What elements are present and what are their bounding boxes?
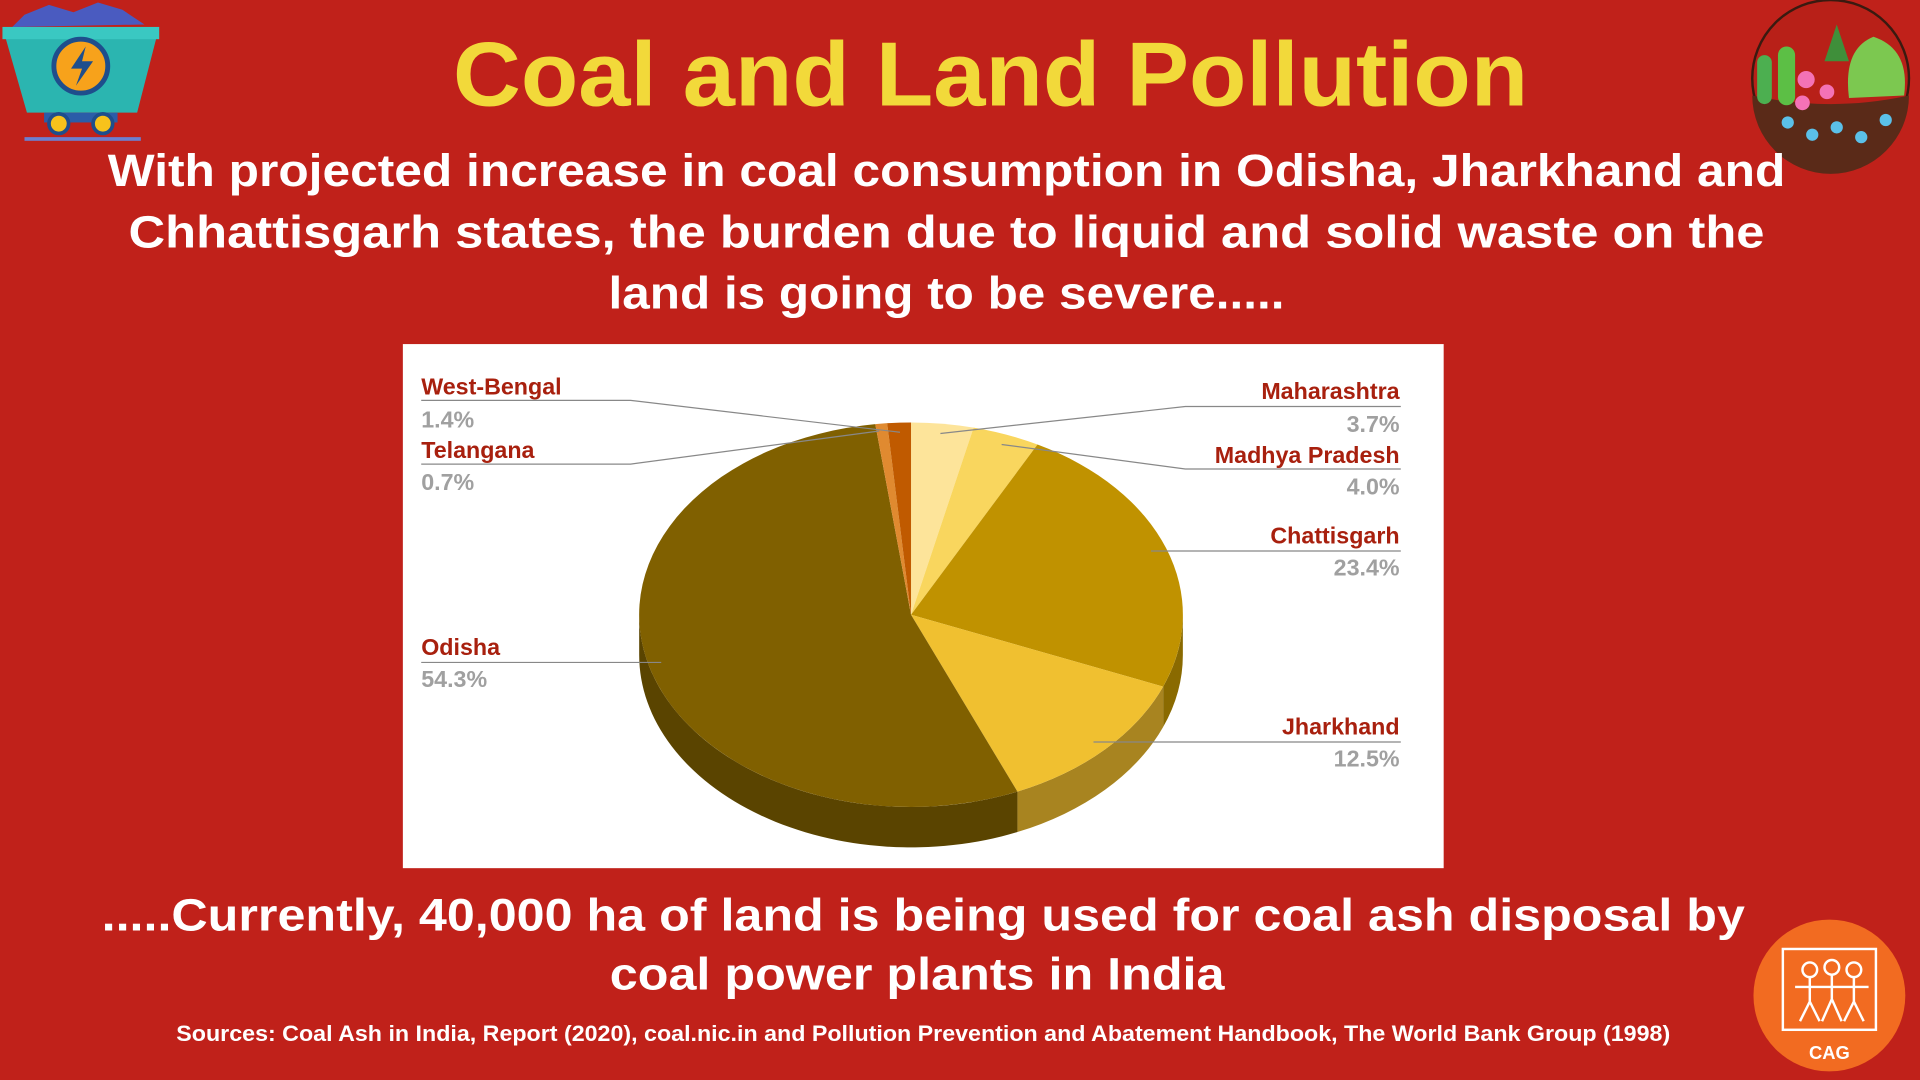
logo: CAG bbox=[1753, 920, 1905, 1071]
sources: Sources: Coal Ash in India, Report (2020), coal.nic.in and Pollution Prevention and Abatement Handbook, The World Bank Group (1998) bbox=[176, 1021, 1670, 1046]
icon: coal cart bbox=[2, 2, 159, 141]
labels: Chattisgarh bbox=[1270, 523, 1400, 549]
labels: Madhya Pradesh bbox=[1215, 442, 1400, 468]
labels: 1.4% bbox=[421, 406, 475, 432]
leader lines bbox=[421, 400, 1401, 742]
icon: terrarium bbox=[1752, 0, 1909, 174]
labels: 12.5% bbox=[1334, 746, 1400, 772]
labels: 54.3% bbox=[421, 666, 487, 692]
labels: Jharkhand bbox=[1282, 714, 1400, 740]
panel: pie chart bbox=[403, 344, 1444, 868]
bottom text bbox=[102, 890, 1745, 999]
bottom text: coal power plants in India bbox=[610, 948, 1225, 999]
subtitle text bbox=[108, 145, 1785, 319]
bottom text: .....Currently, 40,000 ha of land is being used for coal ash disposal by bbox=[102, 890, 1745, 941]
labels: 0.7% bbox=[421, 469, 475, 495]
title: Coal and Land Pollution bbox=[453, 24, 1528, 125]
labels: Maharashtra bbox=[1261, 378, 1401, 404]
labels: West-Bengal bbox=[421, 373, 562, 399]
subtitle text: Chhattisgarh states, the burden due to liquid and solid waste on the bbox=[129, 206, 1764, 257]
subtitle text: land is going to be severe..... bbox=[609, 268, 1284, 319]
pie top slices bbox=[639, 422, 1183, 807]
subtitle text: With projected increase in coal consumption in Odisha, Jharkhand and bbox=[108, 145, 1785, 196]
labels: 23.4% bbox=[1334, 555, 1400, 581]
labels: Telangana bbox=[421, 437, 536, 463]
labels: Odisha bbox=[421, 634, 501, 660]
labels bbox=[421, 373, 1401, 772]
pie side walls bbox=[639, 615, 1183, 847]
logo: CAG: CAG bbox=[1809, 1042, 1850, 1063]
labels: 4.0% bbox=[1347, 474, 1400, 500]
labels: 3.7% bbox=[1347, 411, 1400, 437]
